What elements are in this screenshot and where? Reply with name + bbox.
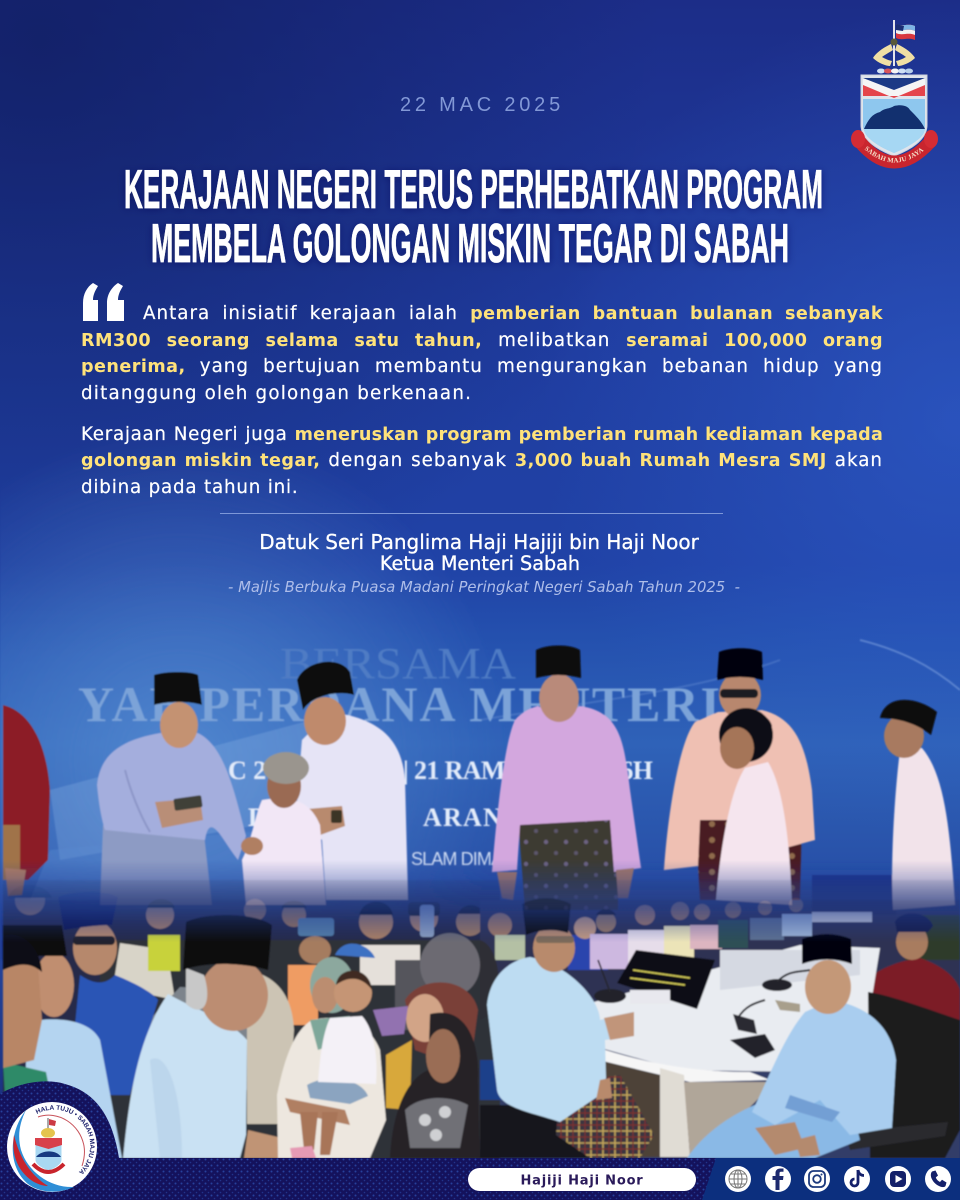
icon: phone (925, 1166, 951, 1192)
quote text: first paragraph (81, 303, 883, 404)
logo badge: Hala Tuju Sabah Maju Jaya (0, 1081, 119, 1200)
quote text: first paragraph: RM300 seorang selama satu tahun, melibatkan seramai 100,000 orang (81, 330, 883, 351)
quote text: first paragraph: Antara inisiatif kerajaan ialah pemberian bantuan bulanan sebanyak (143, 303, 883, 324)
logo badge: Hala Tuju Sabah Maju Jaya: HALA TUJU • SABAH MAJU JAYA (35, 1105, 95, 1174)
speaker name: Datuk Seri Panglima Haji Hajiji bin Haji Noor (259, 530, 699, 554)
motto scroll (851, 130, 938, 168)
quote text: second paragraph (81, 424, 883, 498)
quote mark (83, 283, 124, 321)
screen fade to crowd (0, 860, 960, 960)
screen text: event banner: ARAN, SA (423, 803, 553, 832)
quote text: first paragraph: ditanggung oleh golongan berkenaan. (81, 383, 472, 404)
meeting table (583, 945, 880, 1157)
person: man in white shirt (290, 662, 408, 900)
person: boy in white facing left (716, 708, 792, 905)
icon: instagram (804, 1166, 830, 1192)
screen text: event banner (78, 639, 720, 869)
person: elderly woman in black hijab (390, 1013, 480, 1158)
screen text: event banner: BERSAMA (280, 639, 516, 688)
speaker role: Ketua Menteri Sabah (380, 552, 580, 575)
event caption: - Majlis Berbuka Puasa Madani Peringkat Negeri Sabah Tahun 2025 - (228, 579, 740, 596)
icon: facebook (765, 1166, 791, 1192)
person: man in patterned shirt and polo (140, 970, 294, 1124)
person: prime minister in pale blue greeting crowd (123, 915, 291, 1158)
crossed arms (873, 38, 915, 74)
decorative screen band (30, 640, 960, 915)
quote text: second paragraph: dibina pada tahun ini. (81, 477, 298, 498)
person: man in pale blue baju, smiling (3, 925, 122, 1158)
icon: tiktok (844, 1166, 870, 1192)
person: man in red, left edge (3, 705, 50, 896)
person: man in peach baju with batik sarong (664, 648, 815, 900)
icon: website globe (725, 1166, 751, 1192)
table sign and microphones (594, 950, 810, 1058)
title (124, 158, 823, 274)
person: man in lilac baju with dark sarong (492, 646, 641, 910)
quote text: first paragraph: penerima, yang bertujuan membantu mengurangkan bebanan hidup yang (81, 356, 883, 377)
shield (861, 75, 927, 156)
screen text: event banner: YAB PERDANA MENTERI (78, 676, 720, 732)
name pill: Hajiji Haji Noor (520, 1174, 644, 1188)
person: man at left edge in green (3, 935, 50, 1096)
person: mother holding toddler (277, 957, 386, 1158)
date: 22 MAC 2025 (400, 94, 564, 116)
name pill (468, 1168, 696, 1191)
person: man in lilac shirt holding envelope (97, 672, 246, 905)
quote text: second paragraph: golongan miskin tegar, dengan sebanyak 3,000 buah Rumah Mesra SMJ akan (81, 450, 883, 471)
crest: Sabah coat of arms (851, 20, 938, 168)
photo: stage ceremony with screen backdrop (0, 420, 960, 960)
person: boy in white with songkok, right (880, 700, 955, 910)
person: lady with glasses and purple scarf (373, 982, 478, 1110)
person: prime minister seated, pale blue baju (480, 898, 654, 1158)
small crest (33, 1118, 64, 1172)
meeting room background row (480, 898, 960, 1010)
crowd background (8, 884, 500, 1160)
person: man in royal blue baju (58, 892, 158, 1095)
screen text: event banner: D (248, 803, 267, 832)
person: man in red baju with chair (872, 914, 960, 1021)
quote text: second paragraph: Kerajaan Negeri juga meneruskan program pemberian rumah kediaman kepada (81, 424, 883, 445)
icon: youtube play (885, 1166, 911, 1192)
screen text: event banner: | 21 RAMADAN 1446H (403, 756, 653, 785)
screen text: event banner: C 2025 (228, 756, 305, 785)
photo: community visit and meeting collage (3, 880, 960, 1160)
person: boy in grey cap (241, 752, 326, 905)
flag and pole (894, 20, 915, 66)
motto scroll: SABAH MAJU JAYA (864, 146, 924, 163)
person: chief minister seated, blue baju (687, 934, 960, 1158)
footer bar (0, 1158, 960, 1200)
screen text: event banner: SLAM DIMA (411, 849, 503, 869)
